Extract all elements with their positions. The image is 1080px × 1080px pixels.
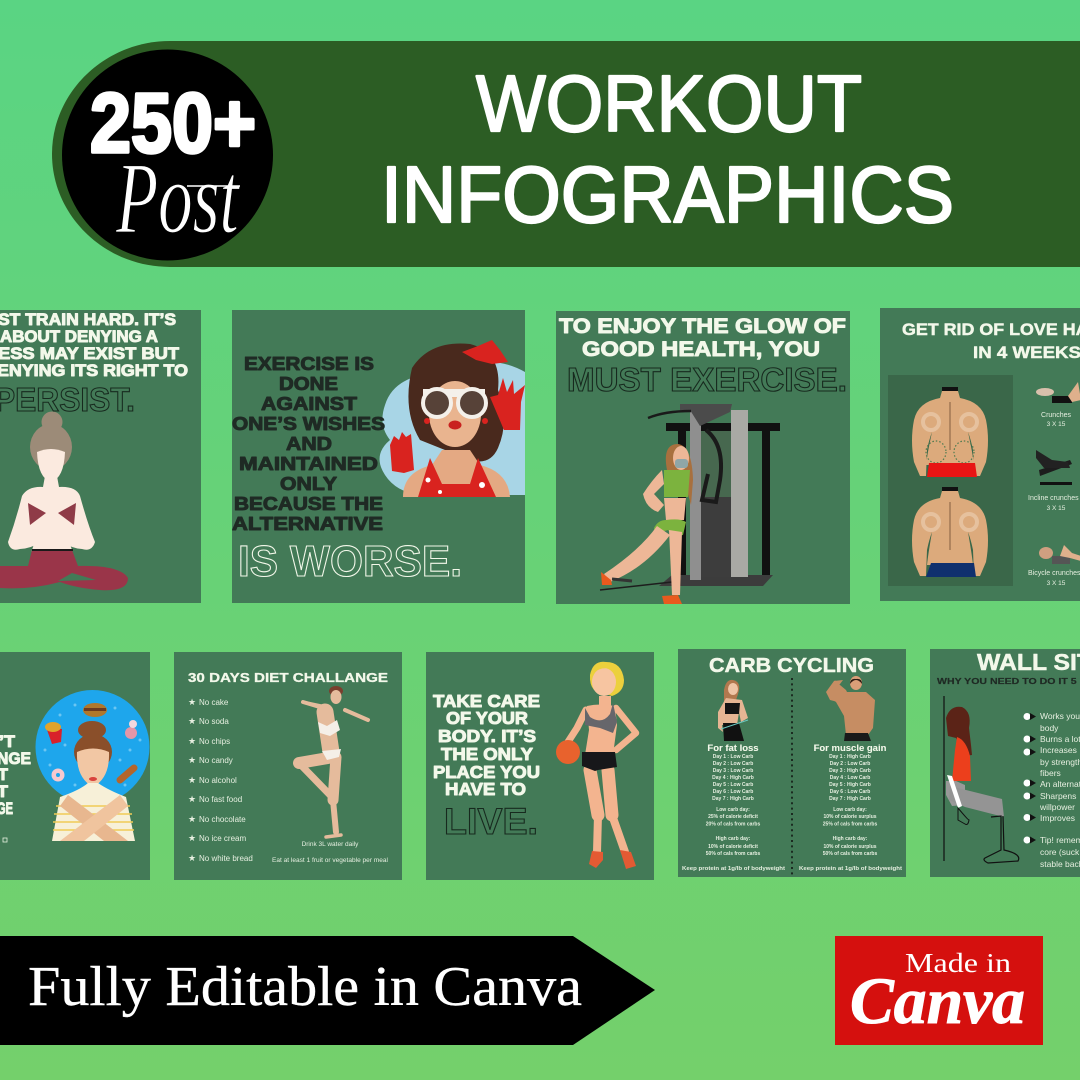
quote text: THE ONLY [441,744,533,764]
quote text: ALTERNATIVE [232,513,383,534]
low and high carb notes: Low carb day: [716,807,750,813]
badge script word: Post [115,141,240,254]
column heading: For muscle gain [814,743,887,754]
exercise sets: crunches: 3 X 15 [1047,421,1066,428]
bullet icons [1024,713,1036,844]
no-food list: No alcohol [199,776,237,785]
schedule: Day 7 : High Carb [712,796,754,802]
panel: exercise quote [232,310,525,603]
schedule: Day 5 : High Carb [829,782,871,788]
outlined word: IS WORSE. [238,537,462,586]
panel title [902,320,1080,362]
no-food list: ★ [188,853,196,863]
panel: persist quote [0,310,201,603]
bullet text: Increases [1040,745,1077,755]
quote text: ESS MAY EXIST BUT [0,345,179,363]
schedule: Day 1 : High Carb [829,754,871,760]
schedule: Day 2 : Low Carb [713,761,753,767]
quote text: ONE’S WISHES [232,413,385,434]
bullet text: body [1040,723,1059,733]
schedule: Day 7 : High Carb [829,796,871,802]
illustration: woman exercising [601,444,693,604]
illustration: back before [912,387,988,477]
quote text: TO ENJOY THE GLOW OF [559,314,846,338]
quote text: GOOD HEALTH, YOU [582,337,820,361]
outlined word: LIVE. [444,801,538,842]
icon: incline crunches [1036,450,1072,485]
title: WORKOUT [476,59,862,148]
title: INFOGRAPHICS [381,150,954,239]
quote text [433,691,540,799]
badge number: 250+ [90,76,256,170]
illustration: posing woman [299,686,368,837]
quote text [0,732,31,818]
no-food list: No fast food [199,795,242,804]
footer ribbon [0,936,655,1045]
panel: glow of good health quote [556,311,850,604]
quote text: ONLY [280,473,338,494]
schedule: Day 1 : Low Carb [713,754,753,760]
illustration: food circle [36,690,150,804]
schedule: Day 6 : Low Carb [713,789,753,795]
no-food list: ★ [188,755,196,765]
illustration: pin-up woman with sunglasses [380,340,525,497]
icon: crunches [1036,382,1080,403]
no-food list: ★ [188,716,196,726]
quote text: ABOUT DENYING A [0,328,158,346]
title [381,59,954,239]
bullet text: Burns a lot [1040,734,1080,744]
exercise label: bicycle crunches: Bicycle crunches [1028,570,1080,577]
no-food list: No candy [199,756,233,765]
panel: love handles [880,308,1080,601]
no-food list: ★ [188,736,196,746]
schedule [829,754,871,802]
no-food list: ★ [188,794,196,804]
illustration: back after [912,487,988,577]
illustration: flexing man [826,676,875,741]
note: fruit: Eat at least 1 fruit or vegetable per meal [272,857,389,864]
quote text: ENYING ITS RIGHT TO [0,362,188,380]
before and after panel [888,375,1013,586]
illustration: woman measuring waist [718,680,748,741]
schedule: Day 3 : High Carb [829,768,871,774]
no-food list: ★ [188,775,196,785]
low and high carb notes: 50% of cals from carbs [706,851,760,857]
banner shape [52,41,1080,267]
panel: don't change quote with food [0,652,150,880]
dotted divider [791,678,793,875]
protein note: Keep protein at 1g/lb of bodyweight [799,866,902,872]
schedule: Day 4 : Low Carb [830,775,870,781]
low and high carb notes: 25% of cals from carbs [823,822,877,828]
no-food list: No ice cream [199,834,246,843]
badge: 250+ post [62,50,273,260]
t crossbar stroke [187,185,240,187]
illustration: gym machine [600,404,780,590]
quote text: AGAINST [261,393,358,414]
illustration: wall sit figure [944,696,1019,863]
schedule: Day 4 : High Carb [712,775,754,781]
low and high carb notes: High carb day: [833,836,868,842]
low and high carb notes: 10% of calorie surplus [823,814,877,820]
note: water: Drink 3L water daily [302,841,359,848]
no-food list [188,697,253,863]
no-food list: ★ [188,833,196,843]
low and high carb notes: 10% of calorie deficit [708,844,758,850]
panel: 30 days diet challenge [174,652,402,880]
quote text: DONE [279,373,338,394]
illustration: woman crossing arms [52,721,135,841]
quote text: HAVE TO [445,779,526,799]
quote text: BODY. IT’S [438,726,536,746]
schedule: Day 6 : Low Carb [830,789,870,795]
quote text [0,311,188,380]
quote text: AND [286,433,332,454]
no-food list: ★ [188,814,196,824]
bullet text: willpower [1039,802,1075,812]
low and high carb notes: 20% of cals from carbs [706,822,760,828]
quote text: ST TRAIN HARD. IT’S [0,311,176,329]
exercise sets: incline: 3 X 15 [1047,505,1066,512]
made in canva badge [835,936,1043,1045]
no-food list: No cake [199,698,229,707]
low and high carb notes: 50% of cals from carbs [823,851,877,857]
no-food list: No white bread [199,854,253,863]
schedule: Day 5 : Low Carb [713,782,753,788]
quote text [559,314,846,361]
outlined dot [3,838,7,842]
column heading: For fat loss [707,743,759,754]
icon: bicycle crunches [1039,545,1080,564]
low and high carb notes [823,807,877,857]
quote text: MAINTAINED [239,453,378,474]
quote text: PLACE YOU [433,762,540,782]
panel: wall sit [930,649,1080,877]
column: muscle gain [799,743,902,872]
low and high carb notes [706,807,760,857]
low and high carb notes: 25% of calorie deficit [708,814,758,820]
schedule: Day 3 : Low Carb [713,768,753,774]
no-food list: ★ [188,697,196,707]
badge small text: Made in [905,948,1012,978]
illustration: yoga woman [0,412,128,590]
panel title: IN 4 WEEKS [973,343,1080,362]
bullet text: Sharpens [1040,791,1076,801]
exercise list [1028,382,1080,587]
exercise label: incline crunches: Incline crunches [1028,495,1079,502]
benefits list [1024,711,1080,869]
bullet text: core (suck [1040,847,1080,857]
protein note: Keep protein at 1g/lb of bodyweight [682,866,785,872]
quote text [232,353,385,534]
exercise sets: bicycle: 3 X 15 [1047,580,1066,587]
exercise label: crunches: Crunches [1041,412,1071,419]
outlined words: MUST EXERCISE. [567,361,847,398]
quote text: EXERCISE IS [244,353,374,374]
quote text: TAKE CARE [433,691,540,711]
bullet text: Improves [1040,813,1075,823]
quote text: BECAUSE THE [234,493,383,514]
ribbon text: Fully Editable in Canva [28,956,582,1018]
bullet text [1039,711,1080,869]
low and high carb notes: Low carb day: [833,807,867,813]
panel: carb cycling [678,649,906,877]
schedule [712,754,754,802]
no-food list: No chips [199,737,230,746]
schedule: Day 2 : Low Carb [830,761,870,767]
badge logo word: Canva [850,965,1025,1038]
low and high carb notes: 10% of calorie surplus [823,844,877,850]
low and high carb notes: High carb day: [716,836,751,842]
header banner [52,41,1080,267]
panel title: 30 DAYS DIET CHALLANGE [188,670,388,685]
no-food list: No soda [199,717,229,726]
no-food list: No chocolate [199,815,246,824]
panel title: CARB CYCLING [709,655,874,677]
illustration: woman with basketball [556,662,636,869]
column: fat loss [682,743,785,872]
panel: take care of your body [426,652,654,880]
bullet text: fibers [1040,768,1061,778]
quote text: OF YOUR [446,708,528,728]
